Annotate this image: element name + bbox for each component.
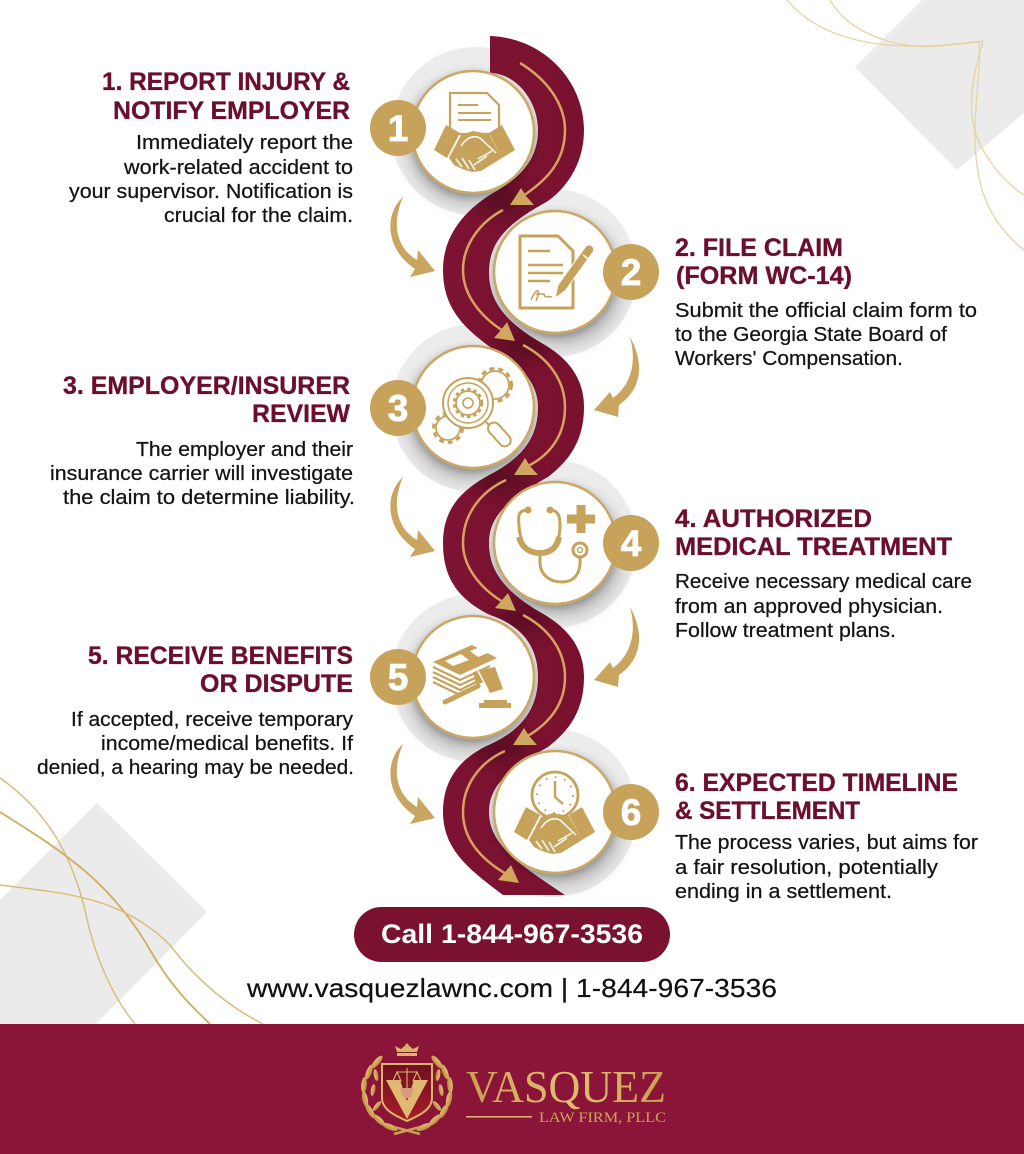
logo: Vasquez Law Firm: [361, 1044, 666, 1134]
number badge 2: [603, 244, 659, 300]
heading: step 3: REVIEW: [252, 400, 350, 428]
body: step 2: Submit the official claim form to: [675, 300, 977, 322]
step 6 node: [494, 751, 616, 873]
heading: step 5: [88, 642, 353, 698]
heading: step 5: OR DISPUTE: [200, 670, 353, 698]
body: step 3: insurance carrier will investigate: [50, 463, 353, 485]
heading: step 2: (FORM WC-14): [676, 262, 852, 290]
call button: [354, 907, 670, 962]
heading: step 3: [63, 372, 350, 428]
number badge 3: 3: [388, 388, 408, 429]
halos behind step circles: [391, 47, 637, 897]
body: step 4: from an approved physician.: [675, 596, 943, 618]
panel: step 5 text: [37, 642, 354, 779]
body: step 6: ending in a settlement.: [675, 881, 892, 903]
logo shield: [382, 1064, 432, 1121]
body: step 3: The employer and their: [136, 439, 353, 461]
panel: step 1 text: [69, 68, 353, 227]
number badge 3: [370, 380, 426, 436]
body: step 6: a fair resolution, potentially: [675, 857, 938, 879]
icon: clock and handshake: [514, 772, 595, 854]
body: step 2: to the Georgia State Board of: [675, 324, 947, 346]
arrow: right curved 1: [594, 337, 639, 417]
body: step 3: the claim to determine liability.: [63, 487, 355, 509]
decoration: top right diamond and gold lines: [787, 0, 1024, 250]
body: step 1: Immediately report the: [136, 132, 353, 154]
heading: step 6: [675, 769, 958, 825]
icon: magnifier and gears: [434, 368, 513, 449]
panel: step 3 text: [50, 372, 355, 509]
icon: stethoscope and plus: [519, 505, 595, 582]
heading: step 6: 6. EXPECTED TIMELINE: [675, 769, 958, 797]
body: step 4: Follow treatment plans.: [675, 620, 896, 642]
body: step 6: The process varies, but aims for: [675, 832, 978, 854]
logo rule: [466, 1116, 532, 1118]
ribbon gold guide lines with arrowheads: [463, 63, 565, 883]
body: step 4: Receive necessary medical care: [675, 571, 972, 593]
heading: step 1: 1. REPORT INJURY &: [102, 68, 350, 96]
body: step 6: [675, 832, 978, 903]
step 2 node: [494, 211, 616, 333]
arrow: right curved 2: [594, 607, 639, 687]
logo laurel wreath: [361, 1054, 453, 1134]
icon: signed form and pen: [520, 236, 594, 308]
heading: step 6: & SETTLEMENT: [675, 797, 860, 825]
icon: money stack and gavel: [433, 645, 511, 708]
icon: document and handshake: [434, 93, 515, 172]
heading: step 1: NOTIFY EMPLOYER: [113, 97, 350, 125]
arrow: left curved 2: [390, 477, 435, 557]
heading: step 2: 2. FILE CLAIM: [675, 234, 843, 262]
footer band: [0, 1024, 1024, 1154]
body: step 5: [37, 709, 354, 779]
heading: step 2: [675, 234, 852, 290]
number badge 1: 1: [388, 108, 408, 149]
body: step 5: If accepted, receive temporary: [71, 709, 353, 731]
body: step 5: denied, a hearing may be needed.: [37, 757, 354, 779]
heading: step 4: 4. AUTHORIZED: [675, 505, 872, 533]
number badge 4: 4: [621, 523, 642, 564]
body: step 1: [69, 132, 353, 227]
heading: step 4: [675, 505, 952, 561]
heading: step 1: [102, 68, 350, 125]
step 5 node: [412, 616, 534, 738]
arrow: left curved 3: [390, 744, 435, 824]
body: step 1: crucial for the claim.: [164, 205, 353, 227]
arrow: left curved 1: [390, 197, 435, 277]
step 1 node: [412, 71, 534, 193]
logo subtitle: LAW FIRM, PLLC: [539, 1110, 666, 1126]
call button: Call 1-844-967-3536: [381, 919, 643, 949]
logo crown: [395, 1044, 419, 1056]
step 4 node: [494, 482, 616, 604]
body: step 4: [675, 571, 972, 642]
heading: step 4: MEDICAL TREATMENT: [675, 533, 952, 561]
logo wordmark: VASQUEZ: [466, 1061, 666, 1112]
body: step 1: work-related accident to: [123, 157, 353, 179]
decoration: bottom left diamond and gold lines: [0, 778, 263, 1024]
panel: step 2 text: [675, 234, 977, 370]
heading: step 5: 5. RECEIVE BENEFITS: [88, 642, 353, 670]
body: step 3: [50, 439, 355, 509]
website and phone line: www.vasquezlawnc.com | 1-844-967-3536: [246, 973, 777, 1003]
number badge 1: [370, 100, 426, 156]
number badge 6: 6: [621, 792, 641, 833]
number badge 4: [603, 515, 659, 571]
panel: step 6 text: [675, 769, 978, 903]
heading: step 3: 3. EMPLOYER/INSURER: [63, 372, 350, 400]
winding ribbon path: [443, 36, 584, 895]
number badge 6: [603, 784, 659, 840]
step 3 node: [412, 346, 534, 468]
body: step 2: Workers' Compensation.: [675, 348, 903, 370]
number badge 2: 2: [621, 252, 641, 293]
number badge 5: 5: [388, 657, 408, 698]
body: step 2: [675, 300, 977, 370]
number badge 5: [370, 649, 426, 705]
panel: step 4 text: [675, 505, 972, 642]
body: step 5: income/medical benefits. If: [101, 733, 353, 755]
body: step 1: your supervisor. Notification is: [69, 181, 353, 203]
